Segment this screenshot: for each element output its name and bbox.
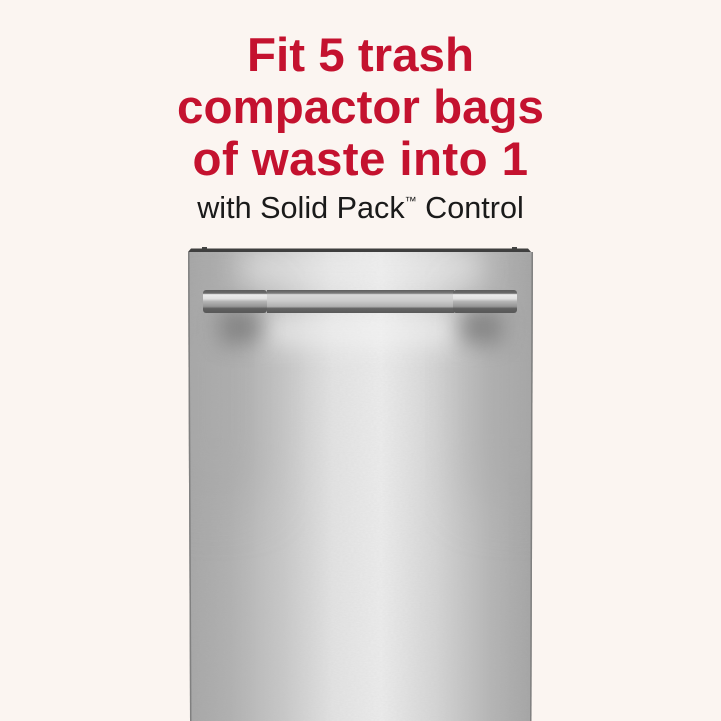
- title: of waste into 1: [193, 133, 528, 186]
- title: [177, 29, 544, 186]
- top edge and hinge pins: [188, 247, 531, 252]
- handle bar: [203, 290, 517, 313]
- title: compactor bags: [177, 81, 544, 134]
- top sheen and mid shade: [240, 256, 480, 282]
- title: Fit 5 trash: [247, 29, 474, 82]
- appliance: stainless steel compactor: [188, 247, 533, 721]
- door panel: [188, 252, 533, 721]
- subtitle: with Solid Pack™ Control: [197, 191, 524, 225]
